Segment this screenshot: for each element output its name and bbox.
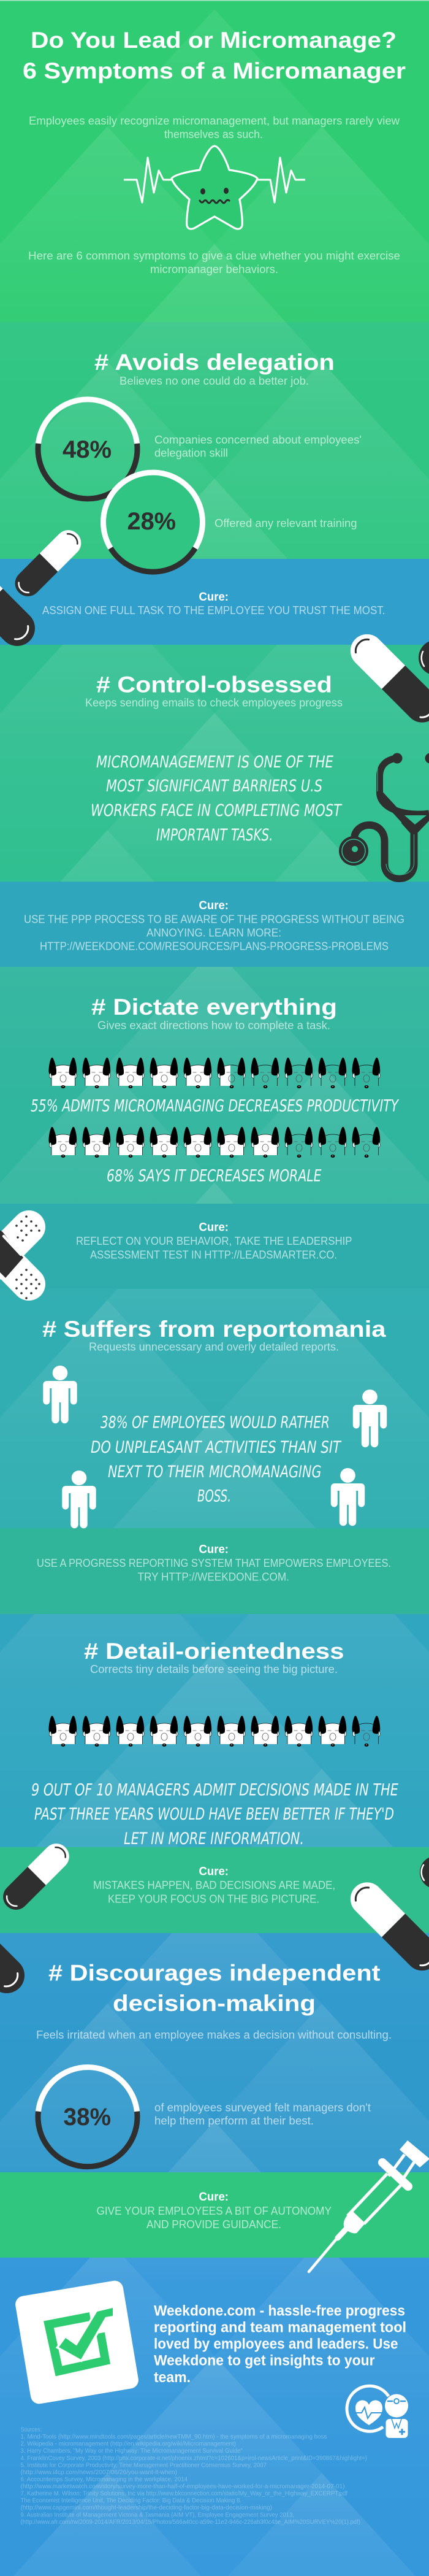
heading: # Avoids delegation bbox=[94, 350, 335, 375]
icon: capsule pills bbox=[0, 525, 86, 653]
panel: cure 1 bbox=[0, 559, 429, 645]
cure label: Cure: bbox=[199, 899, 229, 912]
heading: # Control-obsessed bbox=[96, 672, 332, 697]
handwritten stat: 68 percent: 68% SAYS IT DECREASES MORALE bbox=[107, 1167, 321, 1185]
heading bbox=[48, 1961, 380, 2016]
panel: symptom 6 discourages independent decision-making bbox=[0, 1933, 429, 2172]
icon: employee figure bottom left bbox=[62, 1471, 96, 1528]
subheading: Keeps sending emails to check employees progress bbox=[85, 696, 343, 709]
lead-in text: Here are 6 common symptoms to give a clue whether you might exercise bbox=[28, 249, 400, 262]
text: weekdone pitch: reporting and team management tool bbox=[154, 2319, 406, 2336]
cure label: Cure: bbox=[199, 1865, 229, 1878]
title: 6 Symptoms of a Micromanager bbox=[23, 58, 406, 83]
panel: cure 6 bbox=[0, 2172, 429, 2258]
handwritten stat bbox=[31, 1780, 398, 1848]
intro text bbox=[29, 114, 400, 140]
handwritten quote: MICROMANAGEMENT IS ONE OF THE bbox=[96, 753, 333, 772]
text: sources: (http://www.capgemini.com/thought-leadership/the-deciding-factor-big-data-decision-making) bbox=[21, 2504, 272, 2512]
cure label: Cure: bbox=[199, 591, 229, 604]
cure text: REFLECT ON YOUR BEHAVIOR, TAKE THE LEADERSHIP bbox=[76, 1235, 352, 1247]
subheading: Requests unnecessary and overly detailed reports. bbox=[89, 1340, 339, 1353]
text: weekdone pitch: loved by employees and leaders. Use bbox=[154, 2336, 398, 2352]
handwritten quote: IMPORTANT TASKS. bbox=[156, 826, 273, 845]
text: sources bbox=[21, 2426, 367, 2526]
handwritten stat: BOSS. bbox=[197, 1487, 231, 1505]
text: weekdone pitch: team. bbox=[154, 2369, 191, 2386]
icon: doctor with heart bbox=[347, 2386, 408, 2438]
cure text bbox=[97, 2205, 332, 2231]
text: sources: (http://www.i4cp.com/news/2007/06/26/you-want-it-when) bbox=[21, 2469, 177, 2476]
text: sources: Sources: bbox=[21, 2426, 42, 2433]
panel: symptom 2 control-obsessed bbox=[0, 645, 429, 882]
heading: # Suffers from reportomania bbox=[42, 1317, 386, 1342]
text: weekdone pitch: Weekdone to get insights to your bbox=[154, 2352, 375, 2369]
heading: # Discourages independent bbox=[48, 1961, 380, 1985]
cure text: AND PROVIDE GUIDANCE. bbox=[146, 2218, 281, 2231]
icon: anxious star with heartbeat lines bbox=[124, 146, 305, 229]
cure text bbox=[37, 1557, 391, 1583]
cure text bbox=[76, 1235, 352, 1261]
pictogram row: 68 percent bbox=[49, 1127, 380, 1158]
stat text: 38% bbox=[154, 2101, 371, 2127]
text: sources: 7. Katherine M. Wilson; Trinity Solutions, Inc via http://www.bkconnection.com/static/My_Way_or_the_Highway_EXCERPT.pdf bbox=[21, 2490, 347, 2497]
pictogram row: 55 percent bbox=[49, 1058, 380, 1088]
text: sources: 9. Australian Institute of Management Victoria & Tasmania (AIM VT), Employee Engagement Survey 2013, bbox=[21, 2511, 294, 2518]
subheading: Believes no one could do a better job. bbox=[120, 374, 309, 387]
lead-in text bbox=[28, 249, 400, 275]
cure text: MISTAKES HAPPEN, BAD DECISIONS ARE MADE, bbox=[93, 1879, 335, 1891]
handwritten quote bbox=[91, 753, 343, 845]
cure text: HTTP://WEEKDONE.COM/RESOURCES/PLANS-PROGRESS-PROBLEMS bbox=[40, 940, 389, 952]
panel: cure 5 bbox=[0, 1847, 429, 1933]
heading: decision-making bbox=[113, 1991, 316, 2016]
panel: cure 4 bbox=[0, 1528, 429, 1614]
stat text: 48%: delegation skill bbox=[154, 447, 228, 459]
cure label: Cure: bbox=[199, 1221, 229, 1234]
stat text: 28%: Offered any relevant training bbox=[214, 517, 357, 529]
cure text: ASSESSMENT TEST IN HTTP://LEADSMARTER.CO. bbox=[90, 1249, 337, 1261]
text: sources: 3. Harry Chambers, "My Way or the Highway: The Micromanagement Survival Guide" bbox=[21, 2447, 243, 2455]
icon: employee figure bottom right bbox=[331, 1468, 365, 1526]
donut chart: 38%: 38% bbox=[64, 2104, 111, 2131]
cure text bbox=[24, 913, 404, 952]
handwritten quote: WORKERS FACE IN COMPLETING MOST bbox=[91, 801, 343, 820]
cure text bbox=[93, 1879, 335, 1905]
panel: footer bbox=[0, 2258, 429, 2576]
cure text: KEEP YOUR FOCUS ON THE BIG PICTURE. bbox=[108, 1893, 319, 1905]
cure text: ASSIGN ONE FULL TASK TO THE EMPLOYEE YOU TRUST THE MOST. bbox=[42, 604, 385, 617]
icon: syringe bbox=[309, 2140, 429, 2272]
text: weekdone pitch: Weekdone.com - hassle-free progress bbox=[154, 2303, 405, 2319]
icon: employee figure top left bbox=[43, 1366, 77, 1423]
cure label: Cure: bbox=[199, 1544, 229, 1556]
icon: bandage bbox=[0, 1215, 40, 1299]
subheading: Feels irritated when an employee makes a decision without consulting. bbox=[36, 2028, 392, 2041]
icon: weekdone logo checkbox bbox=[14, 2280, 140, 2405]
title bbox=[23, 28, 406, 83]
donut chart: 48%: 48% bbox=[63, 436, 112, 463]
cure text: TRY HTTP://WEEKDONE.COM. bbox=[137, 1571, 289, 1583]
text: sources: (http://www.marketwatch.com/story/survey-more-than-half-of-employees-have-worked-for-a-micromanager-2014-07-01) bbox=[21, 2483, 344, 2490]
handwritten quote: MOST SIGNIFICANT BARRIERS U.S bbox=[106, 777, 322, 796]
subheading: Gives exact directions how to complete a task. bbox=[97, 1018, 330, 1032]
heading: # Detail-orientedness bbox=[84, 1639, 344, 1664]
donut chart: 48% bbox=[38, 399, 137, 499]
handwritten stat: DO UNPLEASANT ACTIVITIES THAN SIT bbox=[91, 1438, 342, 1457]
stat text: 48% bbox=[154, 433, 362, 459]
handwritten stat: LET IN MORE INFORMATION. bbox=[124, 1829, 304, 1848]
donut chart: 38% bbox=[38, 2067, 137, 2167]
text: sources: 1. Mind-Tools (http://www.mindtools.com/pages/article/newTMM_90.htm) - the symptoms of a micromanaging boss bbox=[21, 2433, 327, 2440]
intro text: themselves as such. bbox=[164, 128, 263, 140]
icon: capsule pills bbox=[0, 1838, 429, 2001]
panel: symptom 3 dictate everything bbox=[31, 998, 400, 1182]
cure text: ANNOYING. LEARN MORE: bbox=[146, 926, 281, 939]
subheading: Corrects tiny details before seeing the big picture. bbox=[90, 1663, 338, 1675]
panel: cure 3 bbox=[0, 1204, 429, 1289]
pictogram row: 9 of 10 bbox=[49, 1716, 380, 1747]
handwritten stat: NEXT TO THEIR MICROMANAGING bbox=[108, 1463, 321, 1482]
text: sources: 6. Accountemps Survey, Micromanaging in the workplace, 2014 bbox=[21, 2476, 188, 2483]
text: sources: (http://www.afr.com/rw/2009-2014/AFR/2013/04/15/Photos/566a40cc-a59e-11e2-946c-226ab3f0c48e_AIM%20SURVEY%20(1).pdf) bbox=[21, 2518, 360, 2526]
panel: cure 2 bbox=[0, 882, 429, 967]
icon: capsule pills bbox=[344, 628, 429, 729]
cure text: USE A PROGRESS REPORTING SYSTEM THAT EMPOWERS EMPLOYEES. bbox=[37, 1557, 391, 1569]
stat text: 38%: help them perform at their best. bbox=[154, 2114, 314, 2127]
cure text: GIVE YOUR EMPLOYEES A BIT OF AUTONOMY bbox=[97, 2205, 332, 2217]
panel: symptom 1 avoids delegation bbox=[0, 322, 429, 572]
panel: symptom 4 reportomania bbox=[0, 1289, 429, 1528]
heading: # Dictate everything bbox=[91, 994, 337, 1020]
icon: employee figure top right bbox=[353, 1390, 387, 1447]
text: sources: 4. FranklinCovey Survey, 2003 (http://phx.corporate-ir.net/phoenix.zhtml?c=102601&p=irol-newsArticle_print&ID=390867&highlight=) bbox=[21, 2455, 367, 2462]
handwritten stat bbox=[91, 1413, 342, 1505]
icon: stethoscope bbox=[339, 753, 429, 879]
stat text: 38%: of employees surveyed felt managers don't bbox=[154, 2101, 371, 2114]
donut chart: 28%: 28% bbox=[127, 508, 176, 535]
title: Do You Lead or Micromanage? bbox=[31, 28, 397, 53]
cure text: USE THE PPP PROCESS TO BE AWARE OF THE PROGRESS WITHOUT BEING bbox=[24, 913, 404, 925]
panel: hero introduction bbox=[0, 0, 429, 322]
lead-in text: micromanager behaviors. bbox=[150, 263, 278, 275]
panel: symptom 5 detail-orientedness bbox=[0, 1614, 429, 1848]
text: sources: 2. Wikipedia - micromanagement (http://en.wikipedia.org/wiki/Micromanagement) bbox=[21, 2440, 236, 2448]
cure label: Cure: bbox=[199, 2191, 229, 2204]
handwritten stat: 38% OF EMPLOYEES WOULD RATHER bbox=[101, 1413, 330, 1432]
text: sources: 5. Institute for Corporate Productivity, Time Management Practitioner Consensus Survey, 2007 bbox=[21, 2461, 267, 2469]
donut chart: 28% bbox=[103, 472, 202, 572]
text: sources: The Economist Intelligence Unit, The Deciding Factor: Big Data & Decision Making 8. bbox=[21, 2497, 241, 2504]
stat text: 48%: Companies concerned about employees' bbox=[154, 433, 362, 446]
intro text: Employees easily recognize micromanagement, but managers rarely view bbox=[29, 114, 400, 127]
text: weekdone pitch bbox=[154, 2303, 406, 2386]
